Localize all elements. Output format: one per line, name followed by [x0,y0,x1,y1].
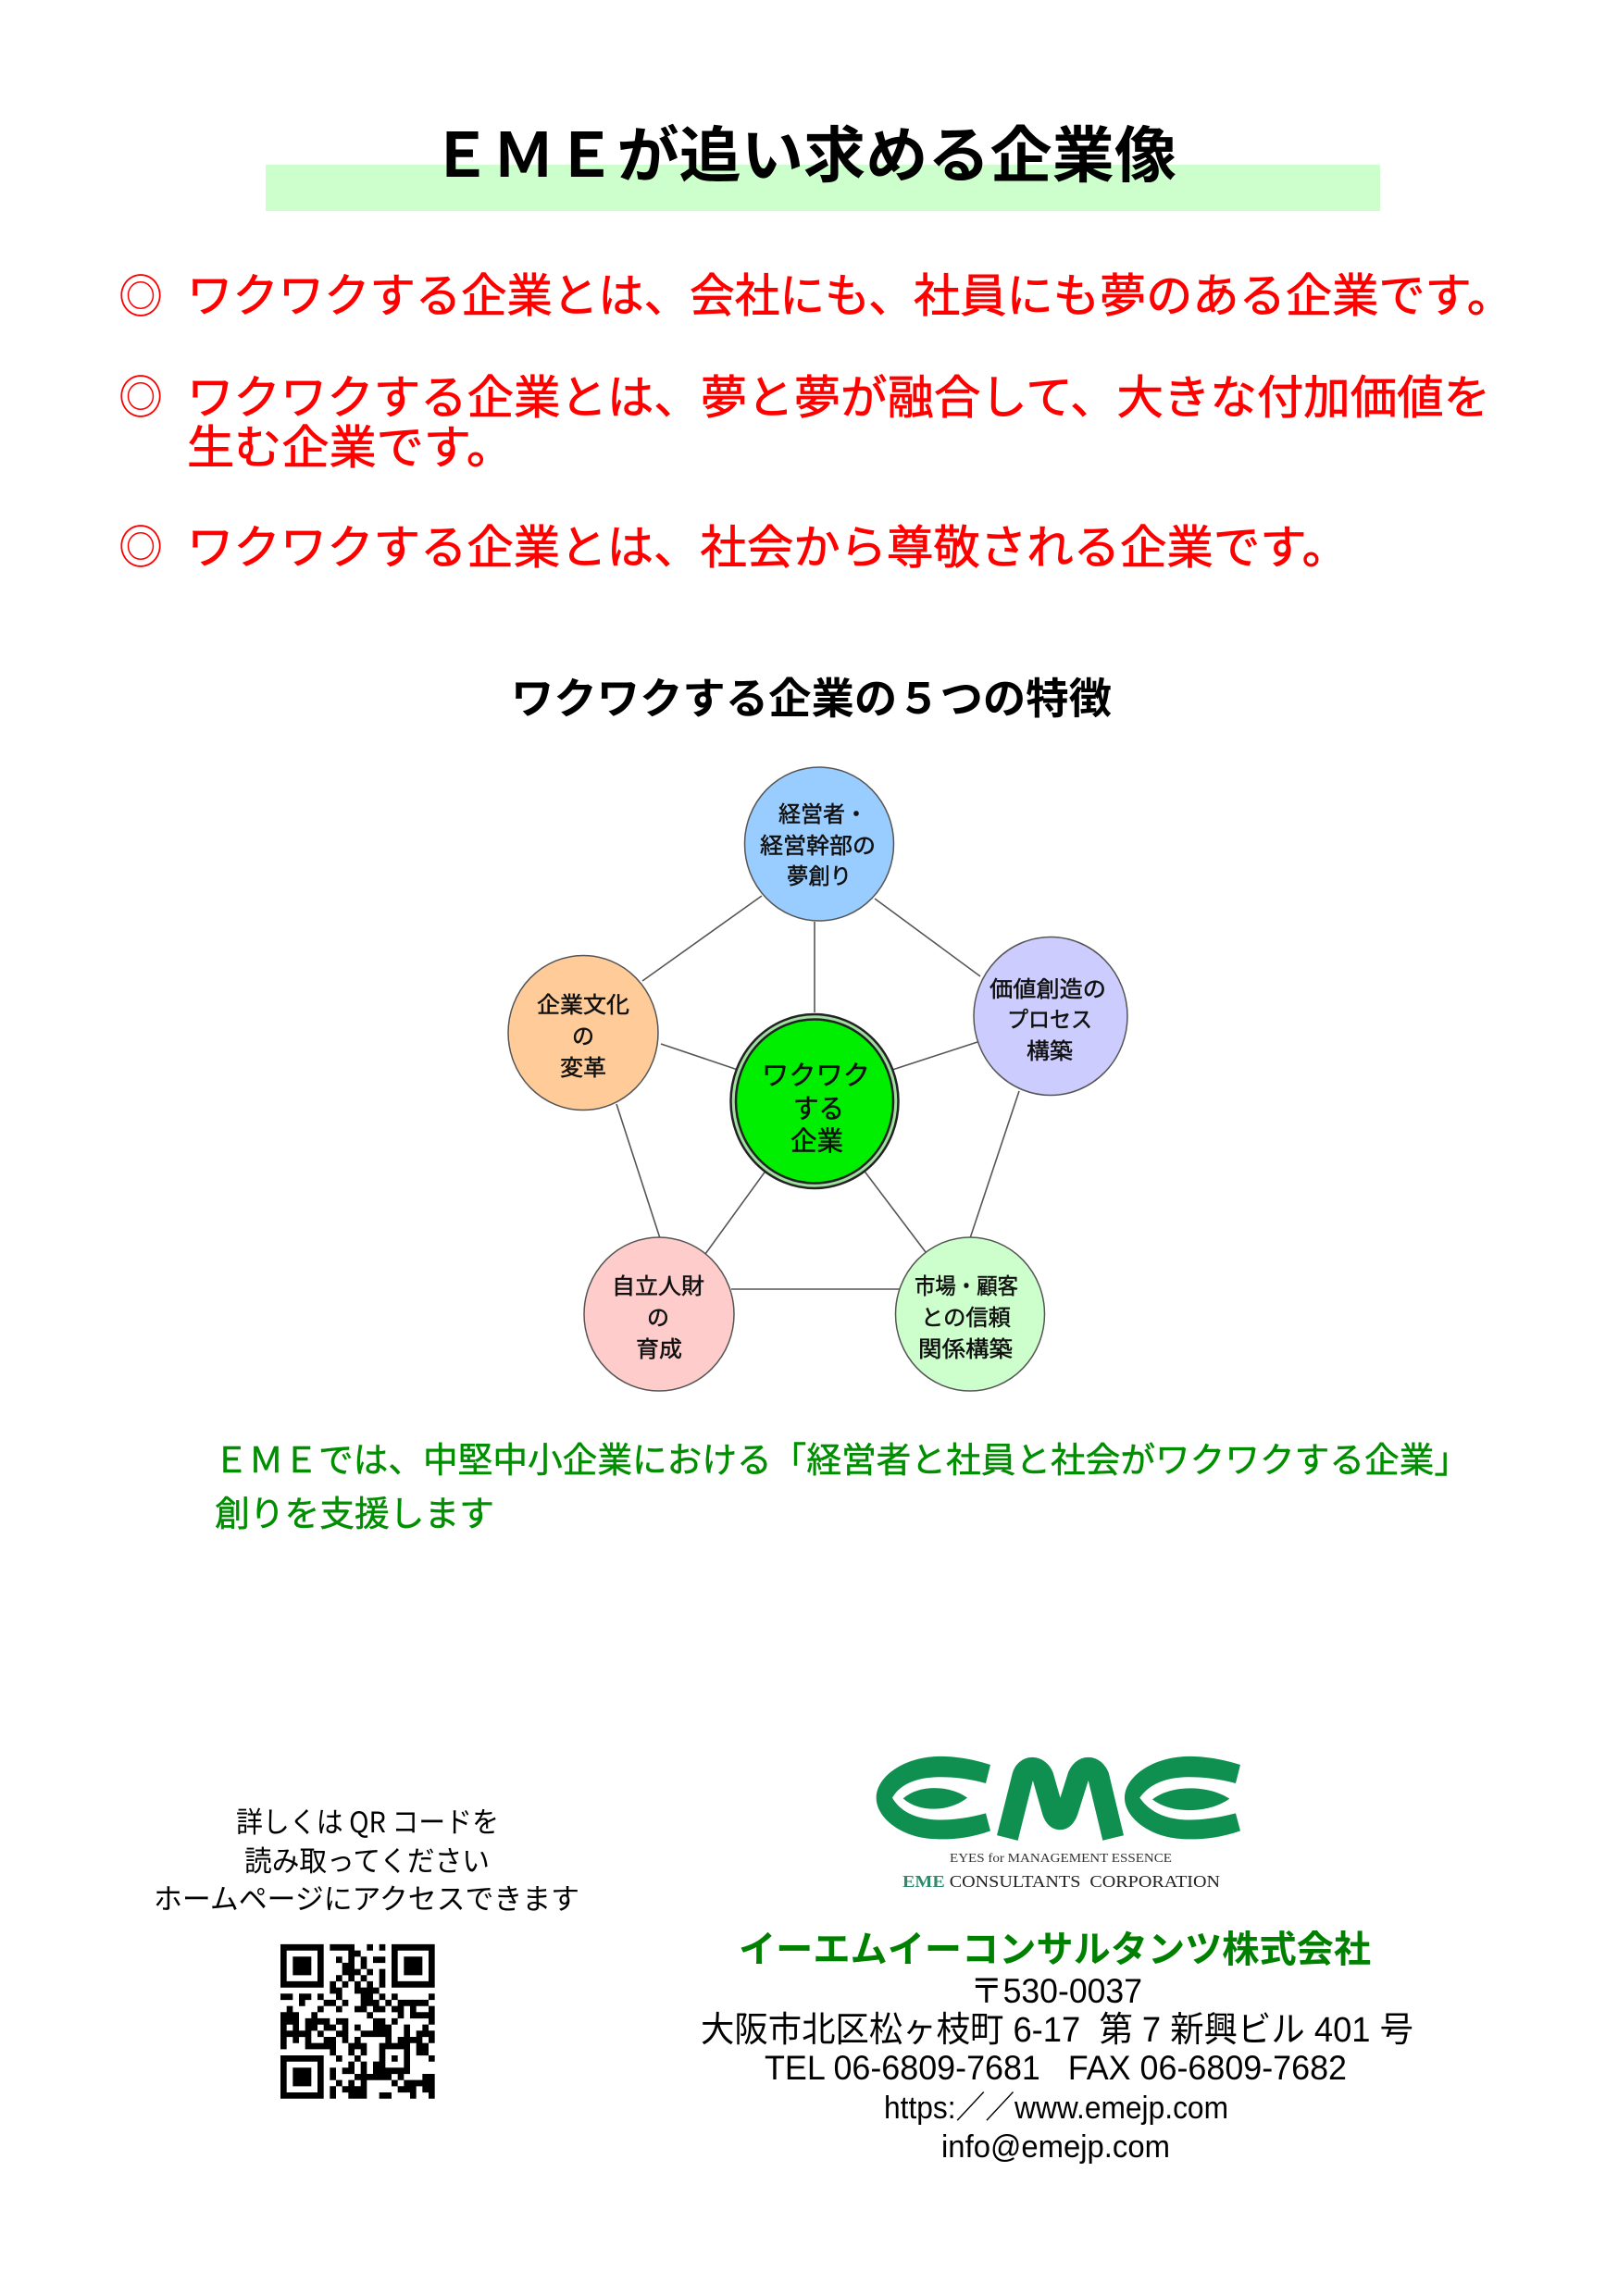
title band [266,165,1380,211]
subtitle: ワクワクする企業の５つの特徴 [511,665,1112,726]
website: https:／／www.emejp.com [884,2091,1228,2126]
phone and fax: TEL 06-6809-7681 FAX 06-6809-7682 [765,2049,1347,2087]
statement 1: 社員にも夢のある企業です。 [914,259,1513,326]
node: center: 企業 [790,1120,843,1159]
connector lines [616,896,1019,1289]
statement 2: ワクワクする企業とは、夢と夢が融合して、大きな付加価値を [187,361,1490,428]
postal code: 〒530-0037 [970,1972,1142,2010]
node: top: 経営者・ [778,796,867,828]
contact details [701,1972,1413,2165]
QR caption [154,1799,579,1917]
node: bottom right: 市場・顧客 [915,1268,1018,1300]
statement 3: ◎ [118,511,163,577]
logo tagline: EYES for MANAGEMENT ESSENCE [950,1852,1172,1866]
pentagon diagram [508,767,1127,1391]
green support statement: ＥＭＥでは、中堅中小企業における「経営者と社員と社会がワクワクする企業」 [214,1432,1469,1483]
QR caption: 読み取ってください [244,1838,490,1880]
node: left: の [572,1018,594,1050]
node: bottom left [584,1237,734,1391]
node: left: 企業文化 [537,987,629,1019]
email: info@emejp.com [941,2129,1170,2165]
QR code [280,1947,435,2095]
node: right: プロセス [1007,1001,1092,1034]
address: 大阪市北区松ヶ枝町 6-17 第 7 新興ビル 401 号 [701,2011,1413,2050]
node: top: 経営幹部の [760,827,876,860]
node: right: 構築 [1027,1033,1073,1065]
node: bottom right: 関係構築 [918,1331,1013,1363]
node: center [731,1014,898,1188]
statement 1: ◎ [118,260,163,327]
statement 2 [118,361,1490,478]
green support statement: 創りを支援します [215,1485,494,1536]
node: center: する [793,1087,844,1126]
company name: イーエムイーコンサルタンツ株式会社 [739,1919,1371,1973]
node: top: 夢創り [787,858,852,890]
statement 1: 会社にも、 [690,259,914,326]
statement 1 [118,259,1513,327]
statement 2: ◎ [118,361,163,428]
logo company name: EME CONSULTANTS CORPORATION [902,1872,1220,1891]
node: top [744,767,894,921]
statement list [118,259,1513,577]
statement 2: 生む企業です。 [187,411,514,478]
QR caption: 詳しくは QR コードを [236,1799,499,1841]
node: right [974,937,1127,1096]
statement 1: ワクワクする企業とは、 [187,259,690,326]
node: right: 価値創造の [989,971,1106,1003]
node: left: 変革 [560,1049,606,1082]
EME logo [877,1756,1240,1891]
statement 3: ワクワクする企業とは、社会から尊敬される企業です。 [187,511,1349,577]
title: ＥＭＥが追い求める企業像 [430,106,1176,195]
node: bottom left: 育成 [636,1331,682,1363]
node: bottom left: の [647,1299,669,1332]
QR caption: ホームページにアクセスできます [154,1876,579,1917]
node: center: ワクワク [762,1054,870,1093]
node: bottom right [896,1237,1044,1391]
node: left [508,955,658,1111]
green support statement [214,1432,1469,1536]
node: bottom left: 自立人財 [612,1268,704,1300]
logo mark [877,1756,1240,1839]
node: bottom right: との信頼 [921,1299,1011,1332]
